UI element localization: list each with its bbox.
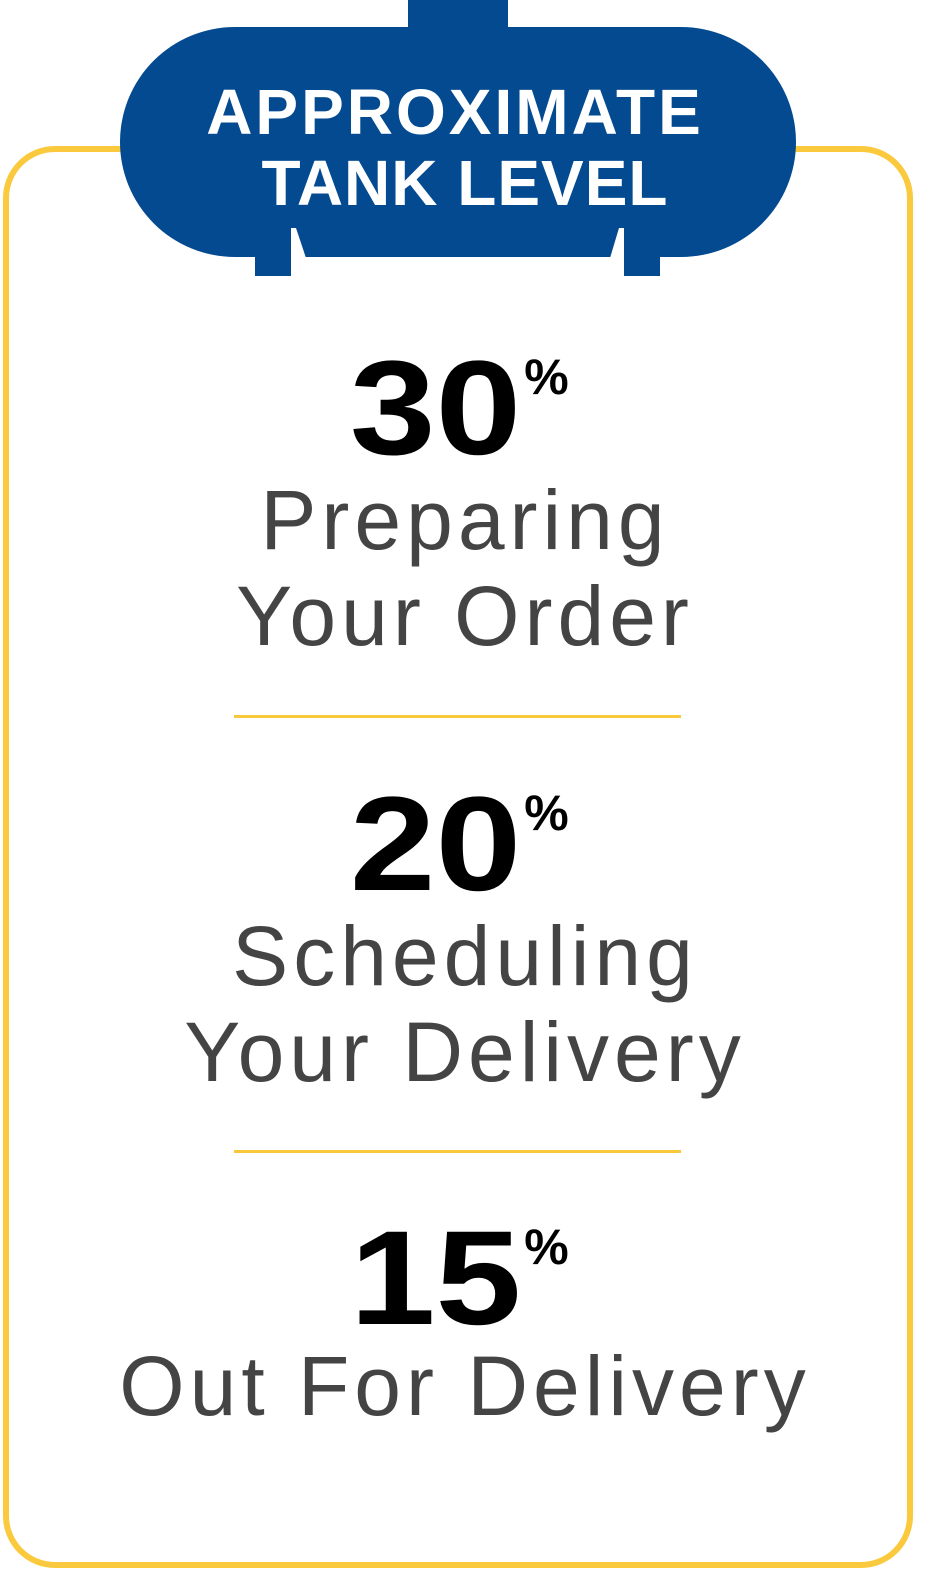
text: Scheduling Your Delivery	[184, 909, 746, 1099]
title: TANK LEVEL	[261, 147, 669, 219]
stat: 15%: %	[524, 1219, 569, 1275]
stat: 15%: 15	[350, 1204, 521, 1353]
text: Scheduling Your Delivery: Your Delivery	[184, 1005, 746, 1099]
stat: 20%: %	[524, 785, 569, 841]
text: Out For Delivery: Out For Delivery	[119, 1339, 811, 1433]
text: Preparing Your Order: Your Order	[236, 569, 694, 663]
stat: 30%: 30	[350, 334, 521, 483]
title: APPROXIMATE	[206, 76, 704, 148]
text: Scheduling Your Delivery: Scheduling	[232, 909, 698, 1003]
title	[206, 76, 704, 219]
text: Preparing Your Order: Preparing	[260, 473, 670, 567]
icon: tank header	[120, 0, 796, 276]
stat: 30%: %	[524, 349, 569, 405]
stat: 20%: 20	[350, 770, 521, 919]
text: Preparing Your Order	[236, 473, 694, 663]
